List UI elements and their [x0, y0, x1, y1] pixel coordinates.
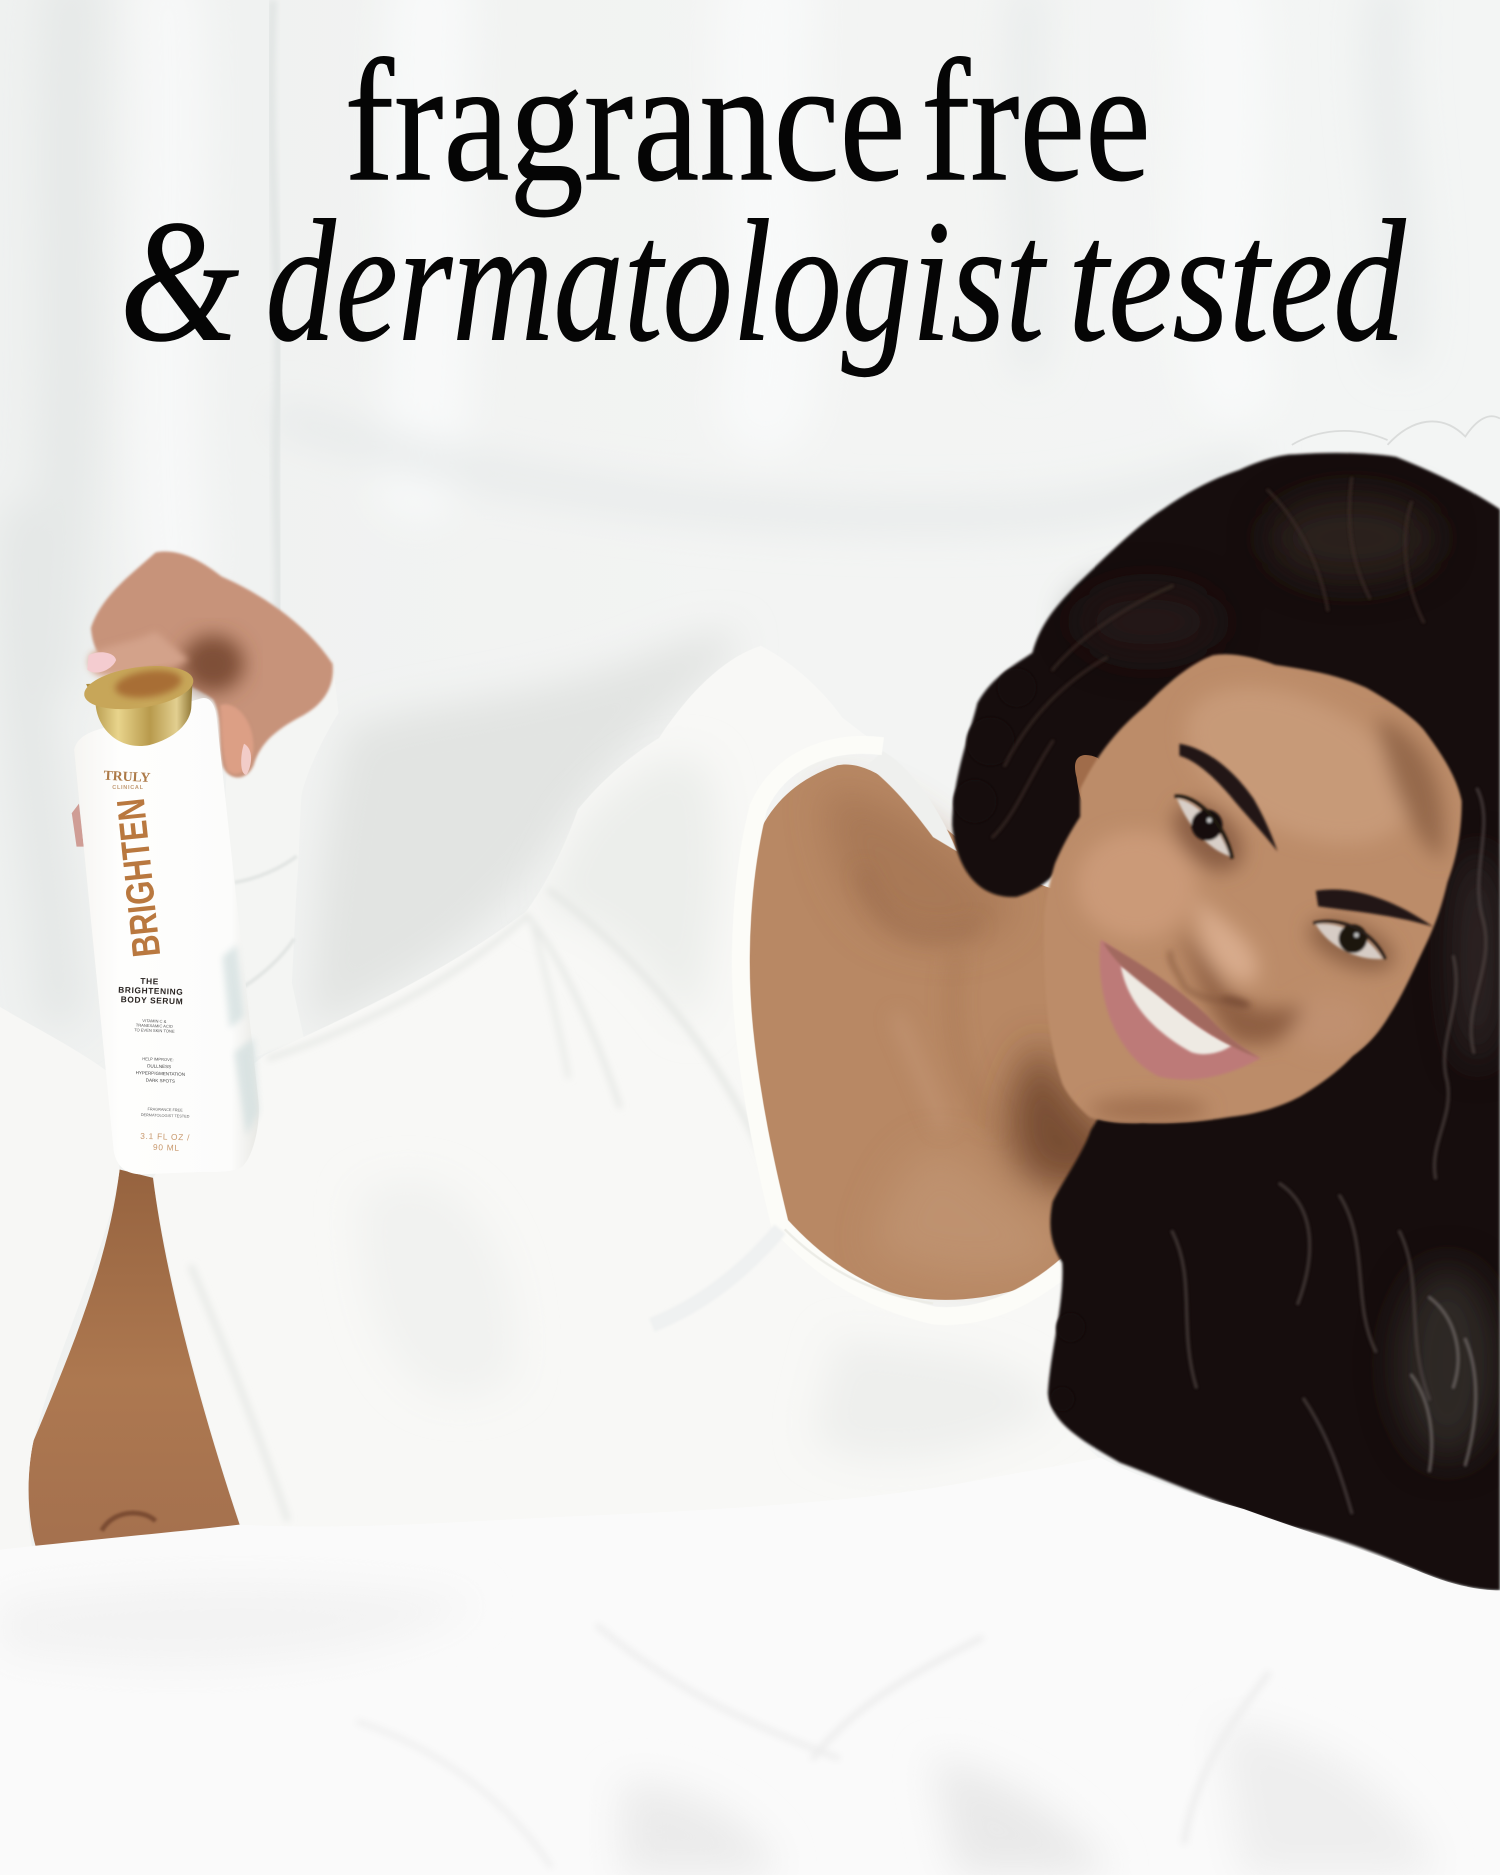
bottle label text: DARK SPOTS — [146, 1078, 175, 1084]
eye right — [1313, 921, 1385, 959]
neckline band inner shade — [785, 1229, 933, 1303]
chest shading — [825, 789, 1136, 1275]
product bottle — [74, 660, 259, 1174]
bottle label text: HELP IMPROVE: — [142, 1056, 174, 1062]
nose — [1170, 951, 1252, 1011]
bottle label text: 90 ML — [153, 1142, 180, 1153]
shirt neckline band — [741, 745, 1067, 1316]
bottle label text — [103, 768, 190, 1153]
bottle label text: DULLNESS — [147, 1063, 171, 1069]
bottle label text: CLINICAL — [112, 785, 144, 791]
title line 2: tested — [1068, 184, 1406, 378]
chest and neck skin — [744, 764, 1136, 1300]
bottle label text: DERMATOLOGIST TESTED — [141, 1113, 190, 1119]
white shirt — [153, 646, 1106, 1529]
bottle label text: VITAMIN C & — [142, 1018, 167, 1024]
face shading — [1077, 655, 1444, 1122]
title — [120, 23, 1406, 378]
ear — [1075, 755, 1112, 813]
bottle label text: HYPERPIGMENTATION — [136, 1070, 185, 1077]
bottle label text: TRANEXAMIC ACID — [136, 1023, 173, 1029]
bottle label text: 3.1 FL OZ / — [140, 1131, 190, 1142]
flyaway hair — [1292, 416, 1500, 445]
white waistband — [0, 1007, 120, 1555]
bottle label text: BRIGHTEN — [109, 796, 169, 959]
belly skin — [29, 1169, 242, 1555]
hair highlights — [1077, 495, 1499, 1459]
title line 1: fragrance — [344, 23, 906, 217]
bottom sheet foreground — [0, 1458, 1500, 1875]
elbow crease — [102, 1513, 156, 1531]
woman: lower body, shirt, hair and face — [0, 416, 1500, 1875]
upper lip — [1103, 942, 1261, 1058]
forearm sleeve — [225, 660, 339, 1057]
teeth — [1121, 966, 1232, 1054]
underarm shadow on sheet — [311, 633, 737, 1028]
face — [1044, 654, 1462, 1123]
shirt gathered seam — [652, 1229, 780, 1325]
gold cap — [81, 660, 196, 746]
title line 2: dermatologist — [266, 184, 1047, 378]
bottle label text: TRULY — [103, 768, 151, 785]
mouth lips — [1100, 940, 1261, 1080]
strap behind neck — [867, 751, 957, 851]
eye left — [1175, 796, 1232, 859]
bottle label text: THE — [140, 976, 159, 986]
bottle label text: TO EVEN SKIN TONE — [134, 1027, 175, 1034]
eyebrow left — [1179, 744, 1278, 851]
bottle body — [74, 698, 259, 1174]
hand and fingers — [72, 552, 333, 847]
shirt shading — [191, 758, 1053, 1519]
eyebrow right — [1316, 890, 1433, 927]
title line 1: free — [921, 23, 1151, 217]
bottle label text: BRIGHTENING — [118, 985, 184, 997]
hair curl bumps on edge — [953, 668, 1085, 1411]
hair mass — [952, 453, 1500, 1590]
bottle label text: BODY SERUM — [121, 994, 183, 1006]
bottle label text: FRAGRANCE FREE — [147, 1107, 183, 1113]
title line 2: & — [120, 184, 239, 378]
bottle side print — [222, 945, 258, 1136]
